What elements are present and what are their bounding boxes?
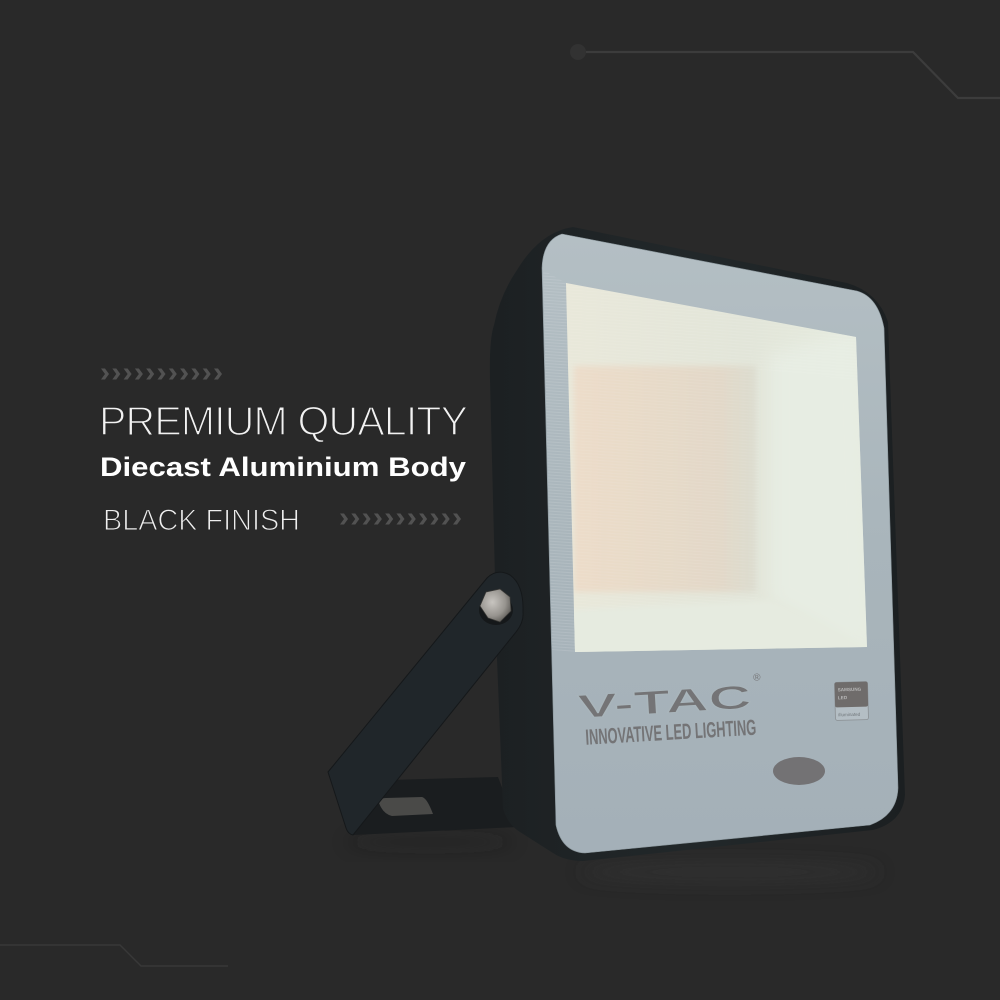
samsung led badge: SAMSUNG bbox=[838, 687, 862, 692]
chevron row: bottom bbox=[340, 514, 461, 524]
v-tac logo bbox=[576, 672, 765, 750]
glass rib strip bbox=[543, 270, 575, 652]
v-tac logo: ® bbox=[753, 672, 762, 684]
bracket arm bbox=[328, 572, 523, 835]
mounting bolt bbox=[479, 589, 513, 625]
lens ribs bbox=[566, 283, 858, 612]
right reflector bbox=[780, 342, 866, 630]
samsung led badge: LED bbox=[838, 695, 848, 700]
warm led array bbox=[574, 366, 756, 592]
lens bbox=[560, 280, 870, 660]
label: black finish: BLACK FINISH bbox=[103, 504, 300, 537]
samsung led badge: illuminated bbox=[838, 712, 861, 717]
bracket lower plate bbox=[353, 777, 517, 835]
samsung led badge bbox=[835, 682, 868, 720]
v-tac logo: V-TAC bbox=[577, 678, 752, 725]
chevron row: top bbox=[101, 368, 222, 380]
heading: premium quality: PREMIUM QUALITY bbox=[99, 398, 468, 444]
circuit line: top right bbox=[570, 44, 1000, 98]
floor reflection bbox=[345, 838, 880, 881]
v-tac logo: INNOVATIVE LED LIGHTING bbox=[585, 715, 757, 750]
motion sensor bbox=[773, 757, 825, 785]
circuit line: bottom left bbox=[0, 945, 228, 966]
housing bbox=[490, 227, 905, 861]
glass front panel bbox=[542, 234, 898, 853]
subheading: diecast aluminium body: Diecast Aluminium Body bbox=[100, 452, 466, 482]
floodlight product bbox=[328, 227, 905, 861]
lower reflector bbox=[574, 614, 858, 652]
